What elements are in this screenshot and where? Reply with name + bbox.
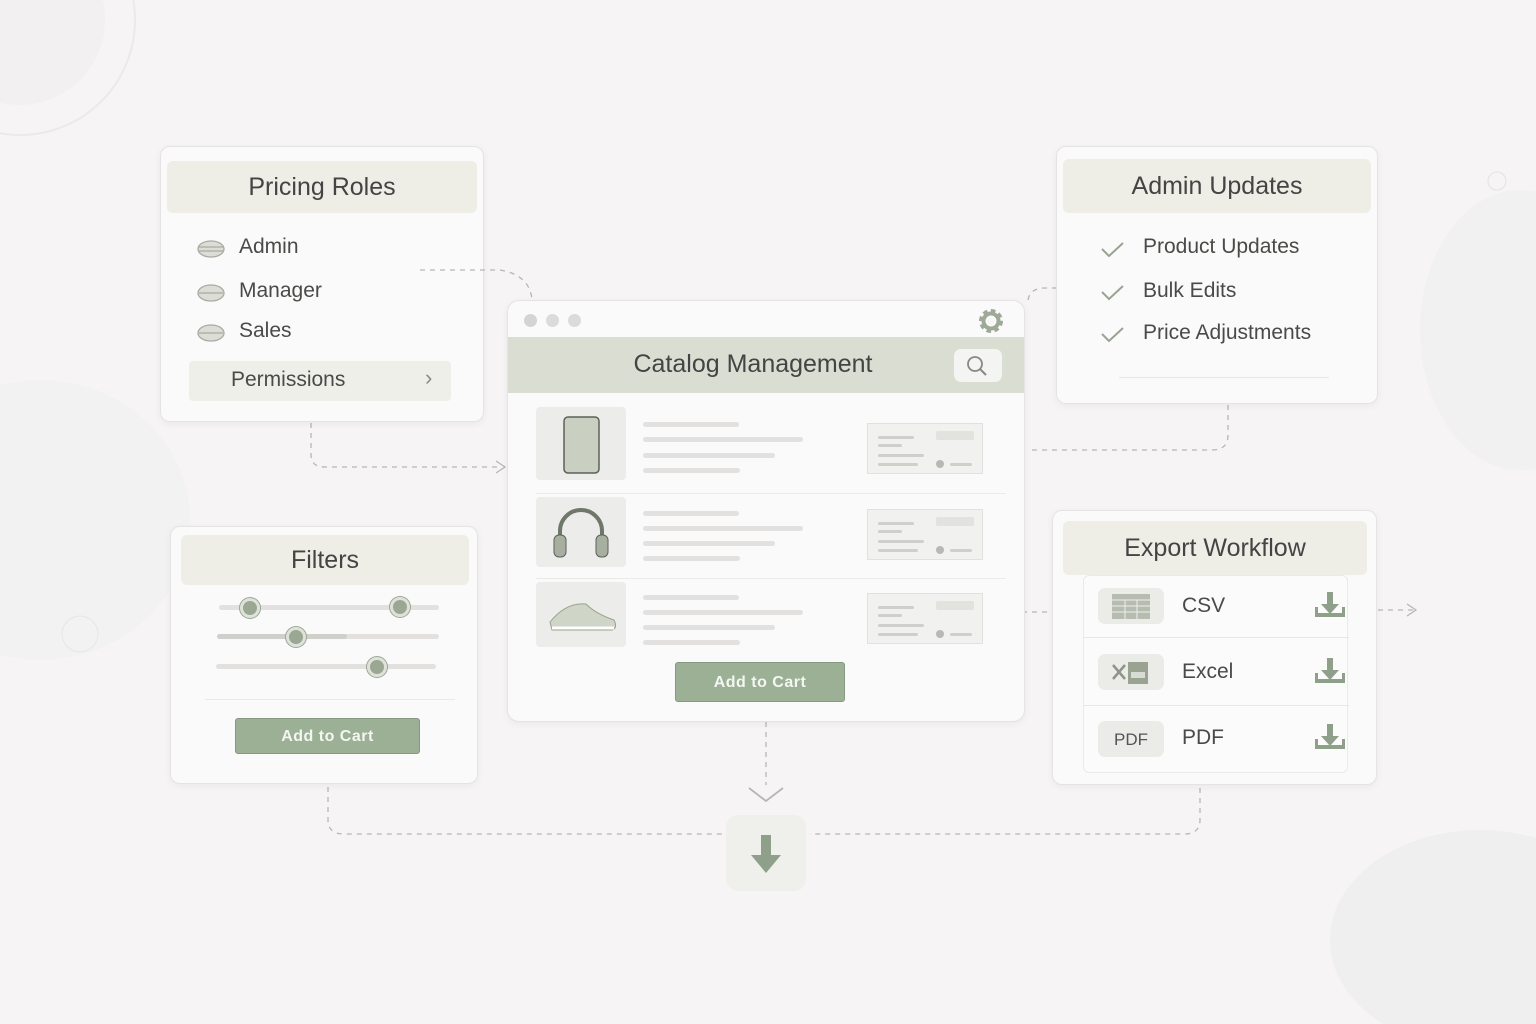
export options: PDF <box>1114 730 1148 749</box>
role list <box>197 235 322 342</box>
heading: export workflow: Export Workflow <box>1124 534 1306 562</box>
heading: filters: Filters <box>291 546 359 574</box>
heading bar: Catalog Management <box>633 350 873 378</box>
sliders <box>216 596 439 678</box>
checklist: Price Adjustments <box>1143 321 1311 344</box>
product: shoe <box>536 582 626 647</box>
product: phone <box>536 407 626 480</box>
checklist <box>1101 235 1311 344</box>
export options: PDF <box>1182 726 1224 749</box>
checklist: Product Updates <box>1143 235 1299 258</box>
export options: Excel <box>1182 660 1233 683</box>
panel: export workflow <box>1052 510 1377 785</box>
panel: catalog management <box>507 300 1025 722</box>
heading: admin updates <box>1063 159 1371 213</box>
product rows <box>536 407 1006 647</box>
panel: filters <box>170 526 478 784</box>
panel: pricing roles <box>160 146 484 422</box>
permissions row: Permissions <box>231 368 345 391</box>
export options <box>1083 575 1348 773</box>
heading bar <box>508 337 1024 393</box>
product: headphones <box>536 497 626 567</box>
button: add to cart <box>675 662 845 702</box>
role list: Admin <box>239 235 299 258</box>
checklist: Bulk Edits <box>1143 279 1236 302</box>
permissions row: › <box>425 365 432 390</box>
icon: gear <box>979 309 1003 333</box>
panel: admin updates <box>1056 146 1378 404</box>
heading: export workflow <box>1063 521 1367 575</box>
window dots <box>524 314 581 327</box>
button: add to cart <box>235 718 420 754</box>
heading: pricing roles: Pricing Roles <box>248 173 396 201</box>
button: add to cart: Add to Cart <box>714 674 806 691</box>
heading: pricing roles <box>167 161 477 213</box>
role list: Manager <box>239 279 322 302</box>
role list: Sales <box>239 319 292 342</box>
icon: download arrow <box>726 815 806 891</box>
connector: pricing to catalog <box>420 269 532 298</box>
button: add to cart: Add to Cart <box>281 728 374 745</box>
heading: filters <box>181 535 469 585</box>
icon: search <box>954 349 1002 382</box>
heading: admin updates: Admin Updates <box>1132 172 1302 200</box>
permissions row <box>189 361 451 401</box>
export options: CSV <box>1182 594 1225 617</box>
